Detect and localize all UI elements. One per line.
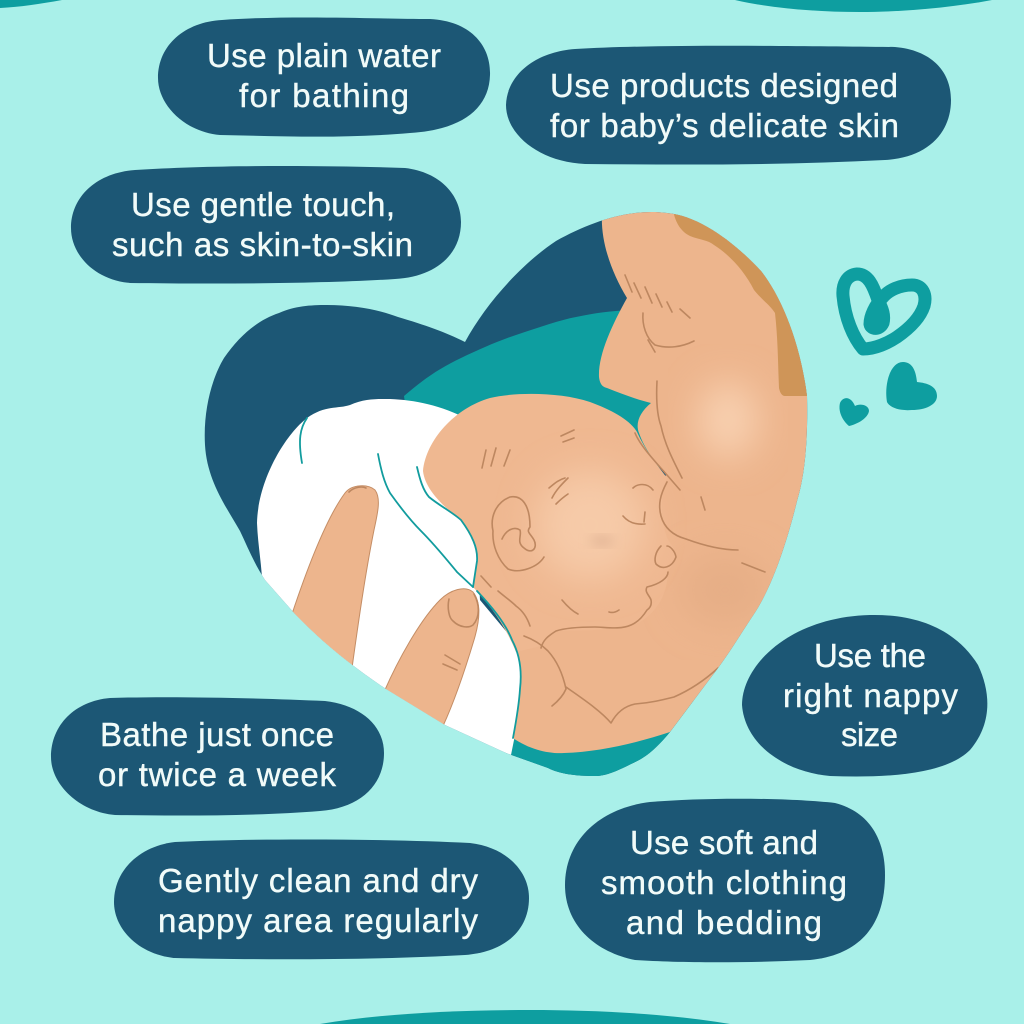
cheek highlight <box>698 382 758 458</box>
tip: right nappy size: size <box>841 716 898 753</box>
tip: gentle touch <box>71 166 461 284</box>
tip: plain water: for bathing <box>239 77 409 114</box>
tip: gentle touch: such as skin-to-skin <box>112 226 413 263</box>
tip: right nappy size: right nappy <box>783 677 958 714</box>
thumb nail <box>448 594 478 627</box>
blanket teal folds <box>300 418 521 738</box>
tip: bathing frequency: or twice a week <box>98 756 336 793</box>
man's face and chest <box>514 212 808 754</box>
bottom wave <box>320 1010 730 1024</box>
baby's head and body <box>423 394 676 652</box>
man's cheek line <box>657 381 682 478</box>
finger nail <box>349 487 366 492</box>
tip: nappy area <box>114 839 529 959</box>
tip: right nappy size: Use the <box>814 637 926 674</box>
white blanket <box>257 399 530 770</box>
tip: products for delicate skin: Use products designed <box>550 67 898 104</box>
baby's eye <box>623 512 645 524</box>
icon: tiny heart <box>839 398 869 426</box>
man's nose and lips on baby <box>635 433 680 490</box>
tip: plain water <box>158 17 490 137</box>
tip: soft clothing: smooth clothing <box>601 864 847 901</box>
baby's eyebrow <box>633 484 653 490</box>
man's hair <box>674 214 807 396</box>
baby's cheek blush <box>590 537 614 545</box>
tip: products for delicate skin: for baby’s delicate skin <box>550 107 899 144</box>
heart illustration <box>204 212 808 776</box>
tip: bathing frequency <box>51 697 384 816</box>
baby's jaw marks <box>562 600 619 614</box>
tip: plain water: Use plain water <box>207 37 441 74</box>
neck shading <box>744 576 774 629</box>
shoulder and chest lines <box>524 636 718 723</box>
baby's mouth and jaw <box>541 572 668 648</box>
top left wave <box>0 0 62 8</box>
tip: nappy area: nappy area regularly <box>158 902 478 939</box>
tip: bathing frequency: Bathe just once <box>100 716 334 753</box>
tip: right nappy size <box>742 615 987 777</box>
tip: products for delicate skin <box>506 46 951 165</box>
teal lower shawl <box>500 701 694 776</box>
icon: large small heart <box>886 362 937 410</box>
top right wave <box>735 0 992 12</box>
baby's temple hair <box>482 430 574 468</box>
baby's nose <box>655 546 676 567</box>
man's brow <box>625 275 690 318</box>
baby's cheek highlight <box>535 470 645 580</box>
man's chin <box>660 482 765 572</box>
man's eye <box>643 313 694 352</box>
baby's hairs by ear <box>549 478 568 504</box>
index finger <box>292 486 378 668</box>
tip: soft clothing <box>565 799 885 962</box>
icon: looped heart logo <box>843 274 925 349</box>
tip: soft clothing: and bedding <box>626 904 822 941</box>
tip: gentle touch: Use gentle touch, <box>131 186 395 223</box>
tip: nappy area: Gently clean and dry <box>158 862 478 899</box>
tip: soft clothing: Use soft and <box>630 824 818 861</box>
skin and feature line work <box>349 275 765 723</box>
heart: dark navy backing <box>205 212 807 776</box>
thumb knuckle <box>443 655 460 670</box>
baby's ear <box>492 497 544 571</box>
thumb <box>384 589 479 726</box>
teal shawl behind baby <box>404 310 659 467</box>
baby's neck creases <box>481 576 530 626</box>
